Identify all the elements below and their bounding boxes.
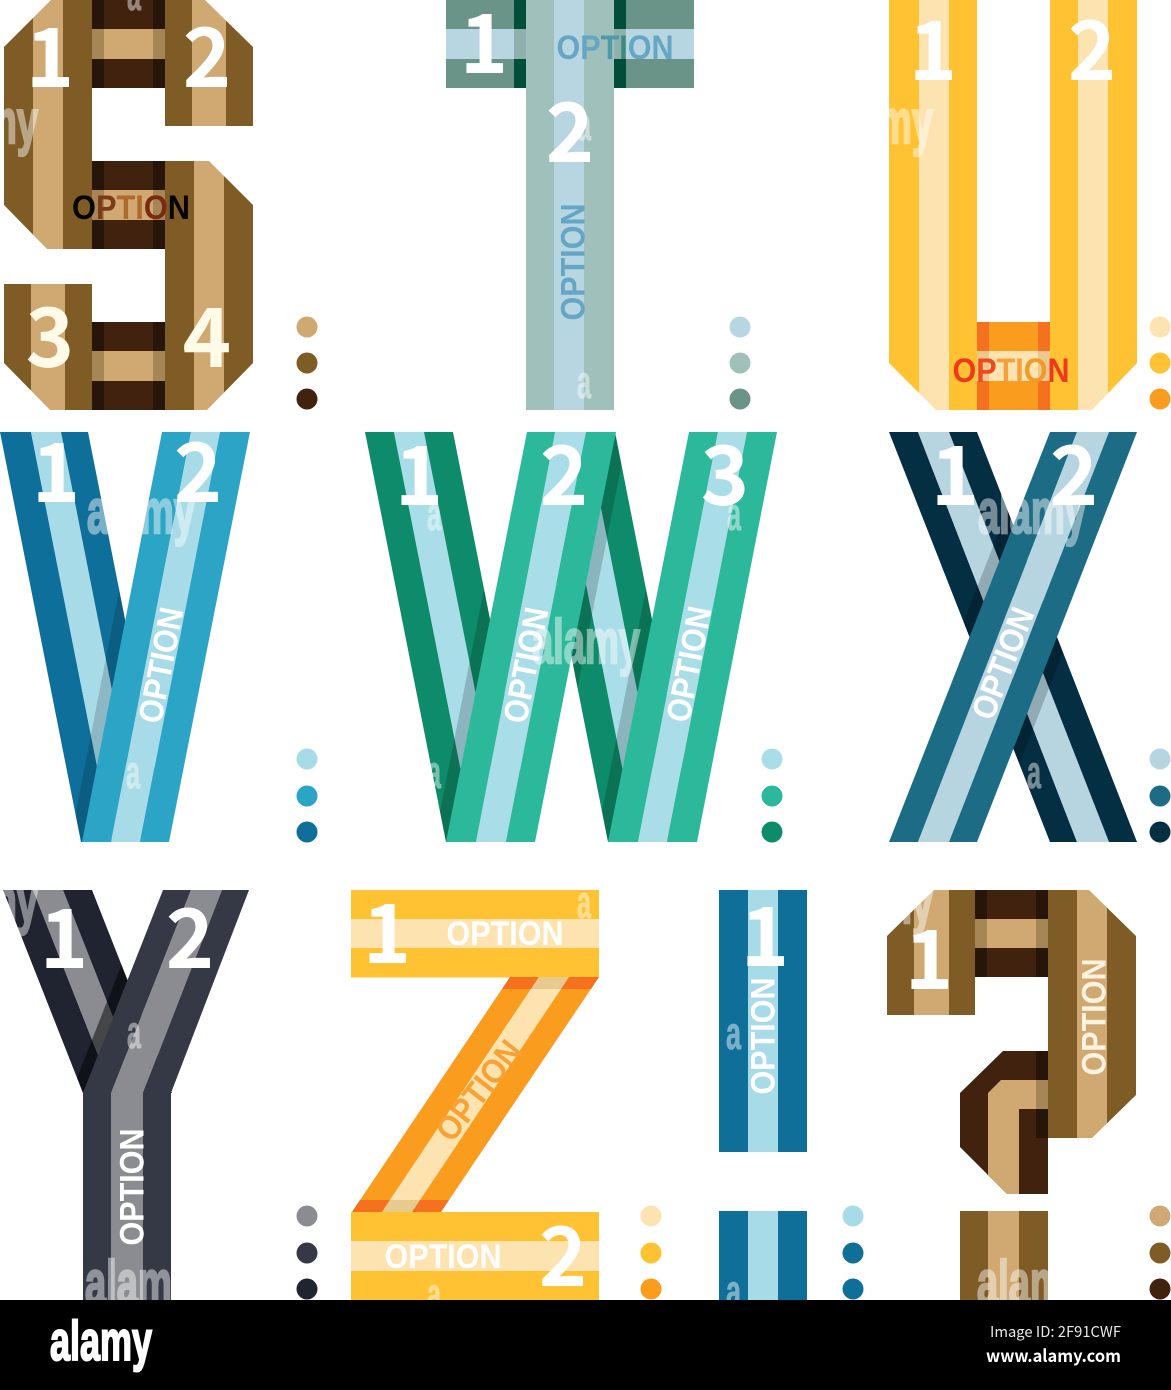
letter V: alamy [87,478,195,547]
letter V: 2 [174,407,222,526]
legend dots: U [1150,316,1170,410]
legend dots: Y [296,1206,318,1300]
legend dots: W [762,748,782,842]
letter Z: 2 [539,1191,587,1310]
letter W: a [427,488,441,540]
exclamation mark [719,871,807,1317]
letter X: a [1027,746,1041,798]
letter T: a [577,356,591,408]
letter T: OPTION [556,29,674,67]
footer bar: www.alamy.com [986,1342,1121,1367]
question mark [887,890,1136,1300]
letter X: 1 [931,410,979,529]
letter T: a [577,98,591,150]
exclamation mark: a [726,1007,741,1059]
letter V [0,407,250,842]
letter Z: OPTION [384,1238,502,1276]
letter T: 2 [546,67,594,186]
legend dots: X [1150,748,1170,842]
letter Z: a [427,1268,441,1320]
letter Z: OPTION [446,915,564,953]
letter S [0,0,253,411]
letter Z: a [577,876,591,928]
letter Z [351,868,599,1320]
letter T: OPTION [554,204,592,320]
letter V: 1 [32,407,80,526]
letter S: 3 [26,272,74,391]
letter W: 3 [701,410,749,529]
letter W: a [727,488,741,540]
letter Y: alamy [85,1249,193,1318]
letter W: 2 [540,410,588,529]
question mark: alamy [977,1249,1085,1318]
legend dots: S [296,316,318,410]
letter W: alamy [532,608,640,677]
footer bar: alamy [50,1309,152,1372]
exclamation mark: OPTION [744,978,782,1094]
letter Y: 2 [166,873,214,992]
letter S: 4 [183,272,231,391]
letter T [446,0,694,410]
letter Y: 1 [40,873,88,992]
letter X: alamy [978,478,1086,547]
letter W [365,410,777,842]
letter U: OPTION [952,352,1070,390]
legend dots: question mark [1150,1206,1170,1300]
letter X: OPTION [964,602,1042,725]
footer bar [0,1300,1171,1390]
letter Z: OPTION [428,1033,530,1149]
letter V: a [126,746,140,798]
legend dots: Z [640,1206,662,1300]
legend dots: V [296,748,318,842]
exclamation mark: 1 [741,871,789,990]
question mark: 1 [905,894,953,1013]
letter Z: 1 [363,868,411,987]
exclamation mark: a [726,1265,741,1317]
letter S: OPTION [72,189,190,227]
letter X: 2 [1050,410,1098,529]
letter W: 1 [395,410,443,529]
letter U: alamy [825,88,933,157]
letter X [889,432,1137,842]
letter W: OPTION [496,604,556,726]
letter V: OPTION [131,604,191,726]
letter U [889,0,1137,410]
letter Y [3,890,249,1300]
question mark: OPTION [1076,958,1114,1076]
letter Y: OPTION [114,1128,152,1246]
legend dots: T [730,316,750,410]
letter W: a [427,746,441,798]
letter W: OPTION [659,603,719,725]
question mark: alamy [825,868,933,937]
letter Y: a [127,1006,141,1058]
footer bar: Image ID: 2F91CWF [990,1321,1121,1342]
legend dots: exclamation mark [842,1206,864,1300]
